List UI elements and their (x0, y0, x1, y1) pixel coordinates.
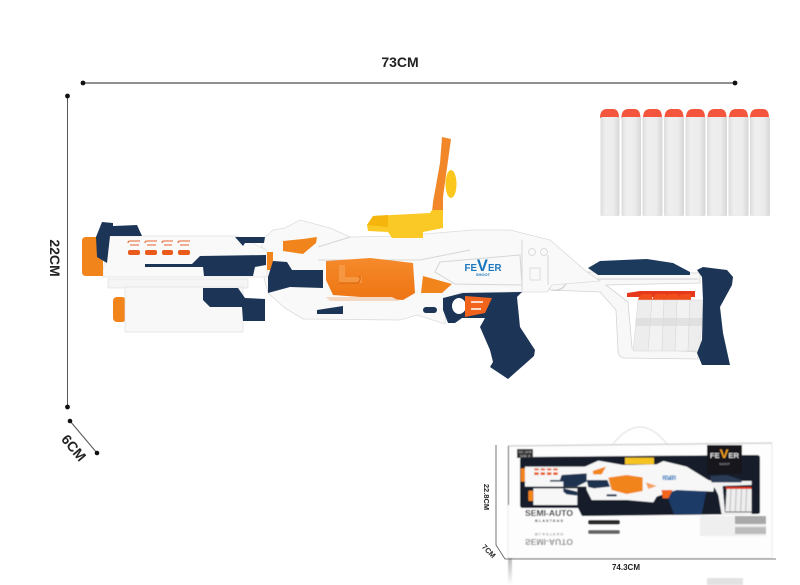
flip sight (367, 137, 456, 238)
lower barrel assembly (108, 279, 265, 332)
box top edge (508, 443, 772, 446)
loose foam darts (600, 109, 770, 216)
box warning panels (700, 516, 766, 536)
box item label: SIZE: 8 (520, 454, 530, 458)
stock hinge details (528, 248, 548, 280)
FEVER SHOOT logo: SHOOT (476, 272, 491, 277)
mini stock darts (726, 487, 752, 489)
box mirrored reflection text (525, 532, 573, 546)
upper barrel assembly (82, 222, 273, 277)
box range badges (588, 520, 620, 534)
box dimension lines and labels: 74.3CM (612, 563, 640, 572)
box dimension lines and labels: 22.8CM (482, 484, 491, 510)
depth dimension: 6CM: 6CM (58, 431, 89, 464)
box dimension lines and labels: 7CM (480, 542, 498, 560)
mini lower barrel (533, 488, 577, 505)
mini stock (708, 481, 752, 514)
main receiver body (262, 220, 600, 324)
mini logo: FEVER (662, 476, 677, 482)
box blaster image (521, 458, 752, 514)
orange side grip (283, 237, 317, 254)
box logo panel (707, 445, 742, 474)
box item label: NO. 1078 (519, 450, 532, 454)
height dimension: 22CM: 22CM (47, 239, 63, 277)
box dimension lines and labels (480, 445, 776, 572)
box item label (517, 449, 533, 458)
width dimension: 73CM: 73CM (381, 54, 419, 70)
mini upper barrel (525, 467, 587, 487)
mini grip (668, 490, 707, 514)
box mirrored reflection text: SEMI-AUTO (525, 537, 573, 546)
butt plate (697, 267, 733, 365)
mini navy parts (550, 473, 587, 487)
orange wedge (421, 276, 452, 293)
mini orange parts (593, 467, 606, 474)
box headline (525, 509, 573, 523)
pistol grip and trigger guard (443, 292, 535, 379)
box floor reflection (508, 558, 743, 585)
stock frame with dart holder (550, 272, 700, 359)
mid body navy panel (268, 261, 323, 293)
box window (520, 455, 760, 516)
blaster toy (82, 137, 733, 379)
box outline (508, 443, 772, 558)
box headline: SEMI-AUTO (525, 509, 573, 518)
body panel lines (318, 237, 548, 292)
width dimension: 73CM (81, 54, 737, 85)
depth dimension: 6CM (58, 419, 99, 464)
height dimension: 22CM (47, 94, 70, 409)
stock darts (627, 291, 704, 351)
mini sight (625, 458, 654, 464)
FEVER SHOOT logo: FEVER (464, 256, 502, 275)
revolver cylinder (326, 258, 415, 301)
product box (508, 427, 772, 585)
box left edge (508, 446, 510, 505)
box logo panel: SHOOT (719, 462, 730, 466)
cheek pad (588, 259, 690, 275)
navy body details (317, 306, 437, 314)
box logo panel: FEVER (710, 447, 739, 461)
box handle (613, 427, 667, 444)
mini receiver (585, 461, 715, 502)
box mirrored reflection text: BLASTEAS (535, 532, 563, 536)
mini slots (534, 468, 558, 470)
box headline: BLASTEAS (535, 519, 563, 523)
